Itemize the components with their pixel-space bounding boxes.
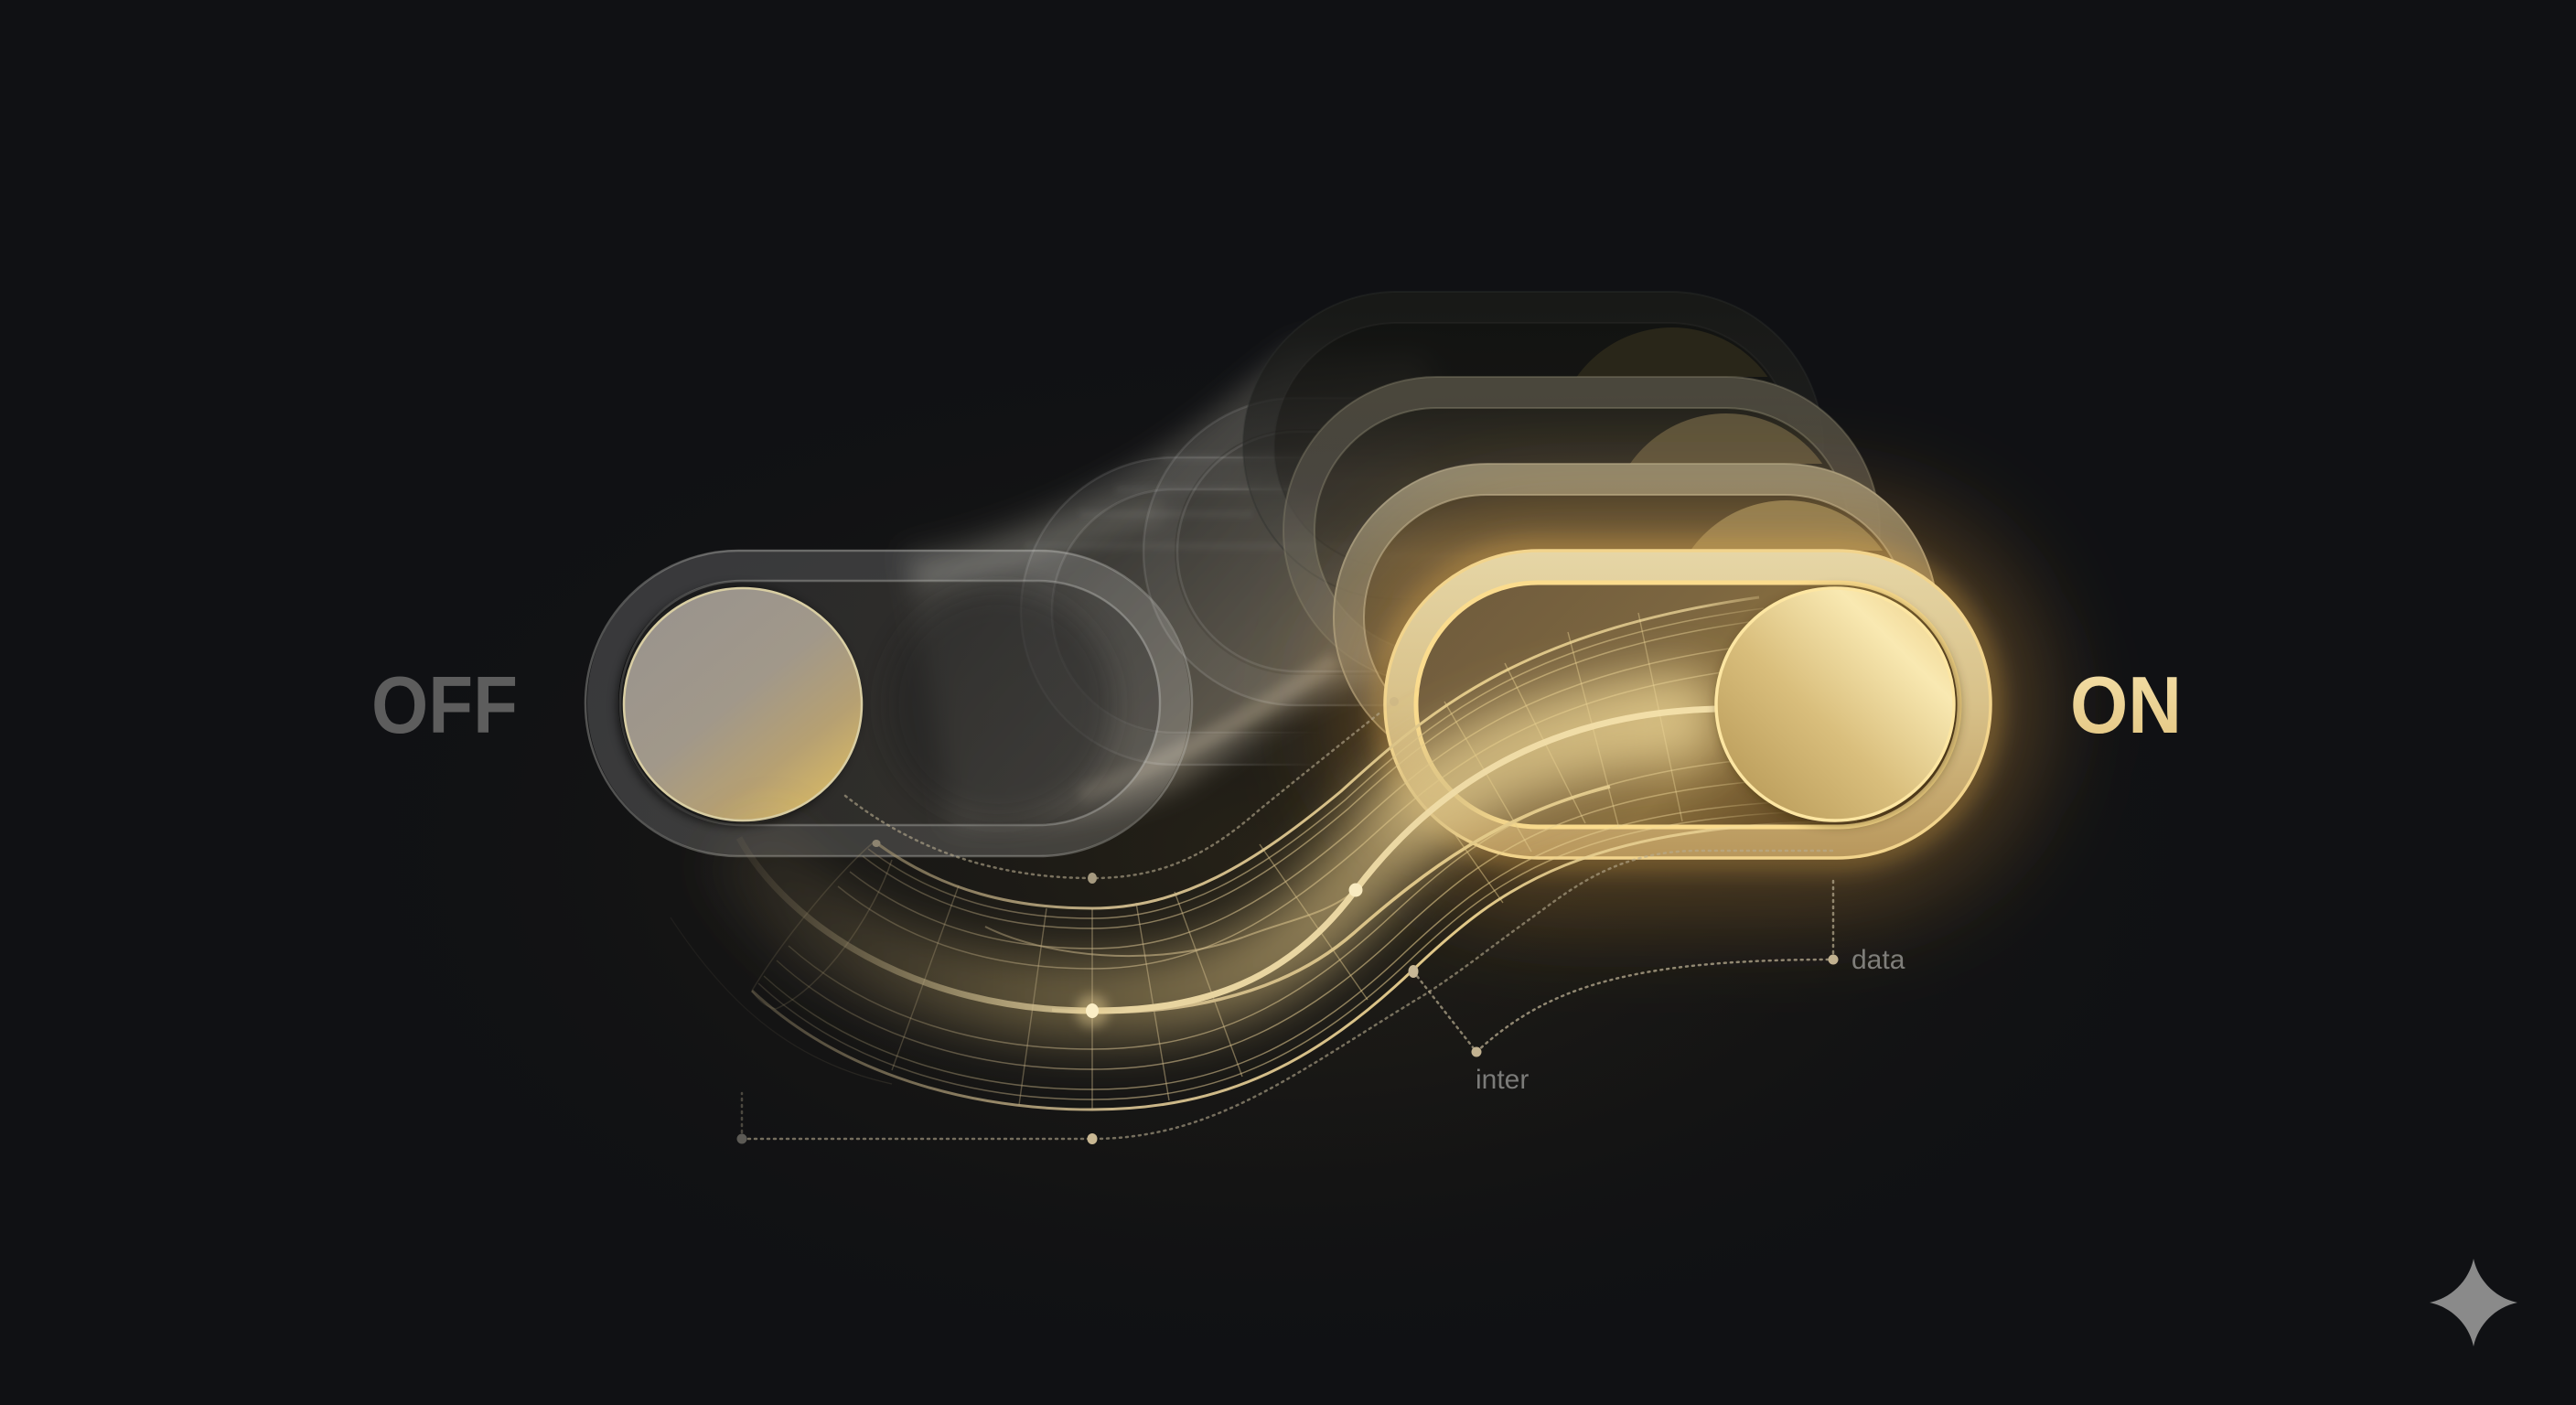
ON knob shadow xyxy=(1718,589,1959,825)
node: ribbon top left xyxy=(873,840,880,847)
smoke lower wisp xyxy=(1079,660,1336,794)
ghost toggle, nearest xyxy=(1333,463,1935,735)
node halo: main curve bottom xyxy=(1076,994,1109,1027)
infographic canvas xyxy=(374,291,2517,1346)
ON label: ON xyxy=(2070,660,2182,750)
OFF track ring xyxy=(603,565,1175,841)
ON toggle track xyxy=(1385,551,1991,858)
dotted annotation lines xyxy=(742,712,1833,1139)
node: inter xyxy=(1471,1046,1482,1057)
ribbon left end section xyxy=(671,842,892,1084)
label: data: data xyxy=(1852,945,1905,975)
smoke haze body xyxy=(901,343,1427,824)
main transition curve xyxy=(739,709,1716,1011)
node: lower left xyxy=(737,1134,746,1143)
ghost outline, far left xyxy=(1021,457,1625,765)
smoke horizontal streaks xyxy=(1025,457,1372,546)
ghost toggle, middle xyxy=(1283,377,1880,684)
ON track interior xyxy=(1416,583,1959,827)
ribbon edge lines xyxy=(752,597,1857,1110)
node: curve bottom centre xyxy=(1086,1003,1099,1018)
ghost band, second xyxy=(1159,413,1733,691)
icon: four-point sparkle xyxy=(2430,1259,2517,1346)
node: data xyxy=(1828,955,1839,964)
ribbon contour lines xyxy=(758,608,1852,1099)
ON knob xyxy=(1716,588,1954,820)
OFF label: OFF xyxy=(371,660,518,750)
secondary curves xyxy=(985,787,1610,1012)
OFF knob xyxy=(624,588,862,820)
motion smoke trail xyxy=(901,343,1427,824)
OFF track interior xyxy=(620,581,1160,825)
node: main curve rise xyxy=(1348,884,1363,896)
ghost toggle, farthest xyxy=(1243,292,1823,599)
wireframe ribbon xyxy=(671,597,1857,1110)
ribbon cross lines xyxy=(892,613,1682,1110)
node: lower centre xyxy=(1087,1133,1098,1144)
OFF knob shadow xyxy=(618,587,856,825)
faint ghost toggles near the trail start xyxy=(1021,398,1747,765)
smoke upper wisp xyxy=(915,508,1162,578)
OFF ghost knob shadow xyxy=(885,590,1113,819)
node: upper dotted xyxy=(1088,873,1097,884)
ON toggle glow xyxy=(1385,551,1991,858)
ghost band, far left xyxy=(1036,473,1610,750)
ON track ring xyxy=(1385,551,1991,858)
node: ribbon edge xyxy=(1409,965,1418,978)
ghost outline, second xyxy=(1143,398,1747,705)
curve glow band xyxy=(739,713,1712,999)
annotation nodes xyxy=(737,697,1839,1144)
label: inter: inter xyxy=(1476,1065,1529,1095)
OFF track outlines xyxy=(585,551,1192,856)
OFF toggle xyxy=(585,551,1192,856)
node: ON ring marker xyxy=(1390,697,1399,706)
